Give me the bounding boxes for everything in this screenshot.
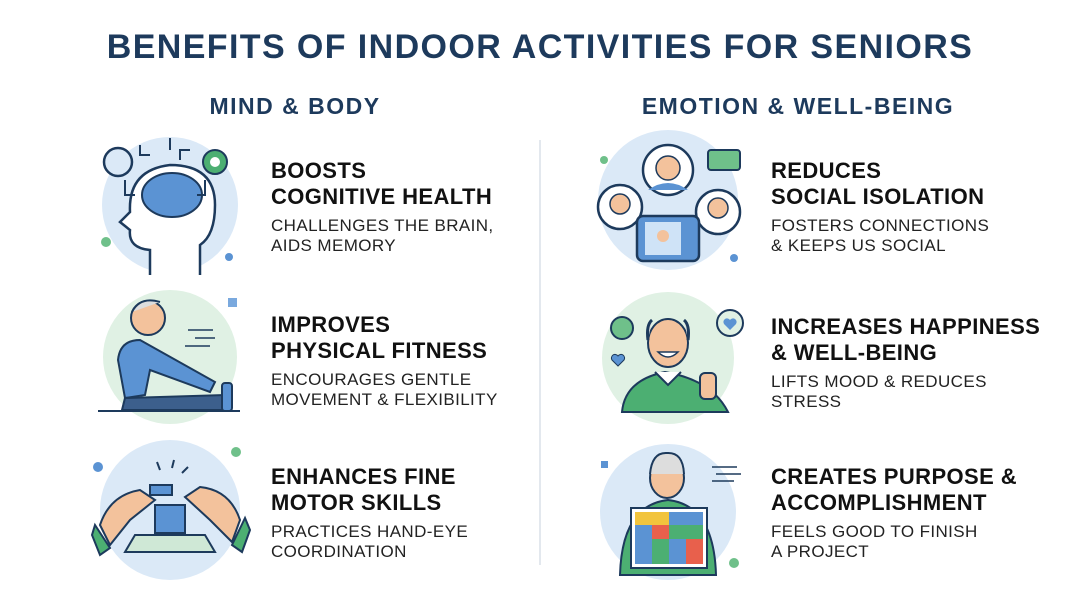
text: physical fitness: ENCOURAGES GENTLE [271, 370, 471, 389]
text: social isolation [771, 158, 989, 255]
text: physical fitness [271, 312, 498, 409]
icon: brain head [101, 137, 238, 275]
text: happiness: STRESS [771, 392, 841, 411]
text: purpose: FEELS GOOD TO FINISH [771, 522, 978, 541]
text: social isolation: REDUCES [771, 158, 881, 183]
text: fine motor skills: PRACTICES HAND-EYE [271, 522, 468, 541]
text: cognitive health [271, 158, 494, 255]
text: fine motor skills [271, 464, 468, 561]
title: BENEFITS OF INDOOR ACTIVITIES FOR SENIORS [107, 28, 973, 66]
text: social isolation: SOCIAL ISOLATION [771, 184, 984, 209]
text: happiness: LIFTS MOOD & REDUCES [771, 372, 987, 391]
column heading: emotion & well-being: EMOTION & WELL-BEING [642, 93, 954, 119]
text: social isolation: FOSTERS CONNECTIONS [771, 216, 989, 235]
icon: hands building [91, 440, 251, 580]
column heading: mind & body: MIND & BODY [209, 93, 381, 119]
icon: stretching senior [98, 290, 240, 424]
text: physical fitness: IMPROVES [271, 312, 390, 337]
text: cognitive health: BOOSTS [271, 158, 366, 183]
text: physical fitness: MOVEMENT & FLEXIBILITY [271, 390, 498, 409]
text: happiness: & WELL-BEING [771, 340, 937, 365]
text: happiness [771, 314, 1040, 411]
text: physical fitness: PHYSICAL FITNESS [271, 338, 487, 363]
text: social isolation: & KEEPS US SOCIAL [771, 236, 946, 255]
text: purpose [771, 464, 1017, 561]
text: fine motor skills: COORDINATION [271, 542, 407, 561]
icon: puzzle senior [600, 444, 741, 580]
text: happiness: INCREASES HAPPINESS [771, 314, 1040, 339]
text: cognitive health: AIDS MEMORY [271, 236, 396, 255]
text: cognitive health: COGNITIVE HEALTH [271, 184, 492, 209]
text: cognitive health: CHALLENGES THE BRAIN, [271, 216, 494, 235]
text: purpose: A PROJECT [771, 542, 869, 561]
text: purpose: CREATES PURPOSE & [771, 464, 1017, 489]
icon: happy senior [602, 292, 744, 424]
icon: social video call [596, 130, 742, 270]
text: purpose: ACCOMPLISHMENT [771, 490, 987, 515]
text: fine motor skills: ENHANCES FINE [271, 464, 456, 489]
text: fine motor skills: MOTOR SKILLS [271, 490, 442, 515]
